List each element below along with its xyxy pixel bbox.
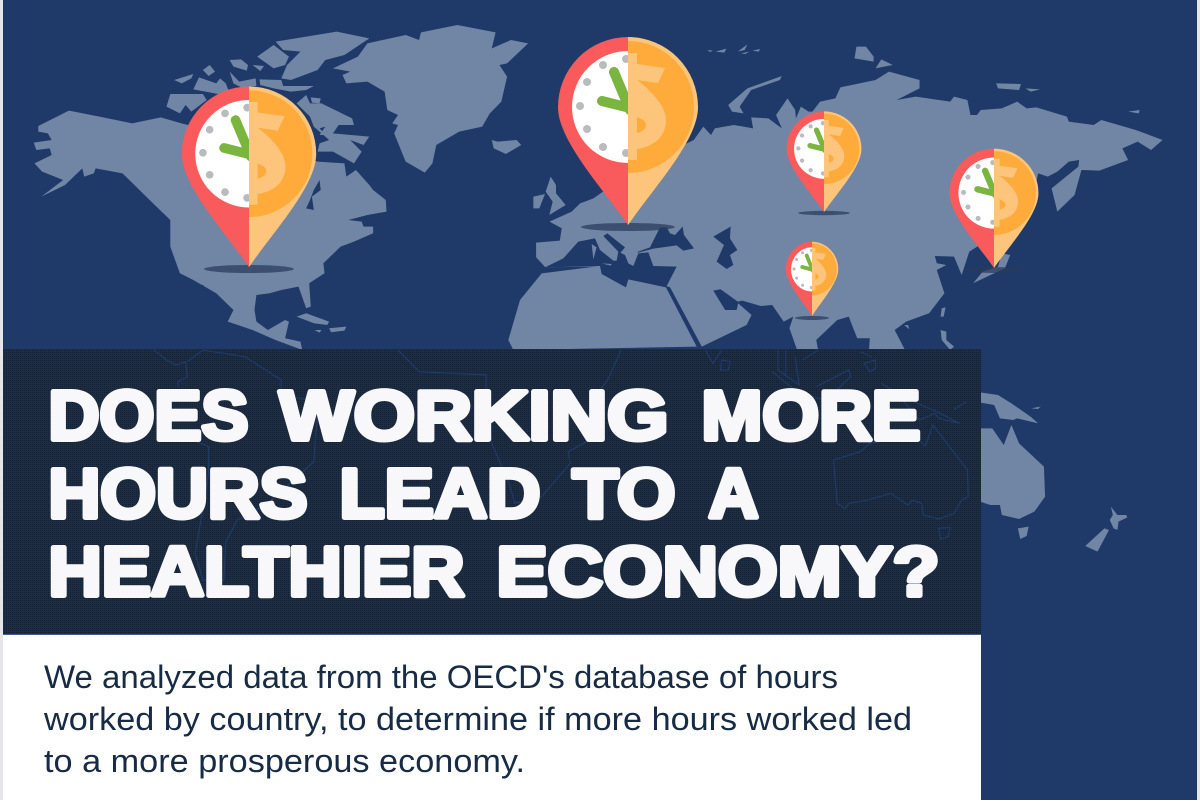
arctic ocean islands — [707, 44, 1140, 113]
pin: clock and dollar, europe — [558, 37, 698, 225]
arctic islands — [166, 32, 369, 163]
title: DOES — [48, 376, 249, 454]
title: WORKING — [280, 376, 668, 454]
new zealand south — [1085, 528, 1109, 552]
tasmania — [1018, 527, 1029, 539]
baja gulf — [202, 285, 218, 315]
black sea — [637, 227, 694, 253]
pin: clock and dollar, east asia — [950, 149, 1038, 268]
title: ECONOMY? — [496, 532, 940, 610]
map: north america and arctic islands — [34, 25, 528, 350]
new zealand north — [1110, 507, 1127, 530]
mediterranean sea — [545, 238, 677, 287]
adriatic sea — [603, 233, 625, 253]
title: TO — [572, 454, 676, 532]
eurasia landmass — [536, 72, 1163, 350]
pin shadows — [204, 211, 1023, 320]
map: eurasia — [536, 44, 1163, 350]
panel: title background — [3, 349, 981, 634]
caspian sea — [713, 227, 737, 269]
caribbean islands — [297, 313, 346, 333]
africa — [508, 266, 697, 350]
pin: clock and dollar, north america — [182, 87, 316, 267]
pin: clock and dollar, south asia — [786, 242, 838, 316]
map: mediterranean region — [508, 177, 737, 350]
panel rule — [3, 634, 981, 635]
intro text: worked by country, to determine if more hours worked led — [43, 701, 912, 737]
title: A — [708, 454, 758, 532]
panel: intro white box — [3, 635, 981, 800]
sicily — [602, 263, 612, 266]
map: oceania — [975, 392, 1127, 552]
hudson bay — [306, 180, 321, 210]
title: HOURS — [48, 454, 308, 532]
japan — [973, 253, 1010, 283]
ireland — [533, 194, 545, 208]
north america — [34, 111, 387, 350]
intro text — [43, 659, 912, 779]
sardinia — [592, 244, 597, 259]
small island — [1031, 403, 1043, 409]
britain — [546, 177, 566, 215]
right page edge — [1197, 0, 1200, 800]
title: MORE — [702, 376, 920, 454]
greenland — [333, 25, 528, 173]
new guinea — [975, 392, 1038, 423]
title: LEAD — [340, 454, 540, 532]
intro text: to a more prosperous economy. — [44, 743, 525, 779]
faint map outlines in title panel — [153, 349, 968, 580]
pacific islands — [904, 307, 954, 350]
australia — [975, 425, 1045, 519]
title: HEALTHIER — [48, 532, 464, 610]
iceland — [492, 140, 521, 154]
left page edge — [0, 0, 3, 800]
pin: clock and dollar, russia — [787, 111, 861, 212]
scandinavia peninsula — [728, 76, 782, 113]
world map — [34, 25, 1163, 552]
intro text: We analyzed data from the OECD's database of hours — [44, 659, 838, 695]
title — [48, 376, 940, 610]
